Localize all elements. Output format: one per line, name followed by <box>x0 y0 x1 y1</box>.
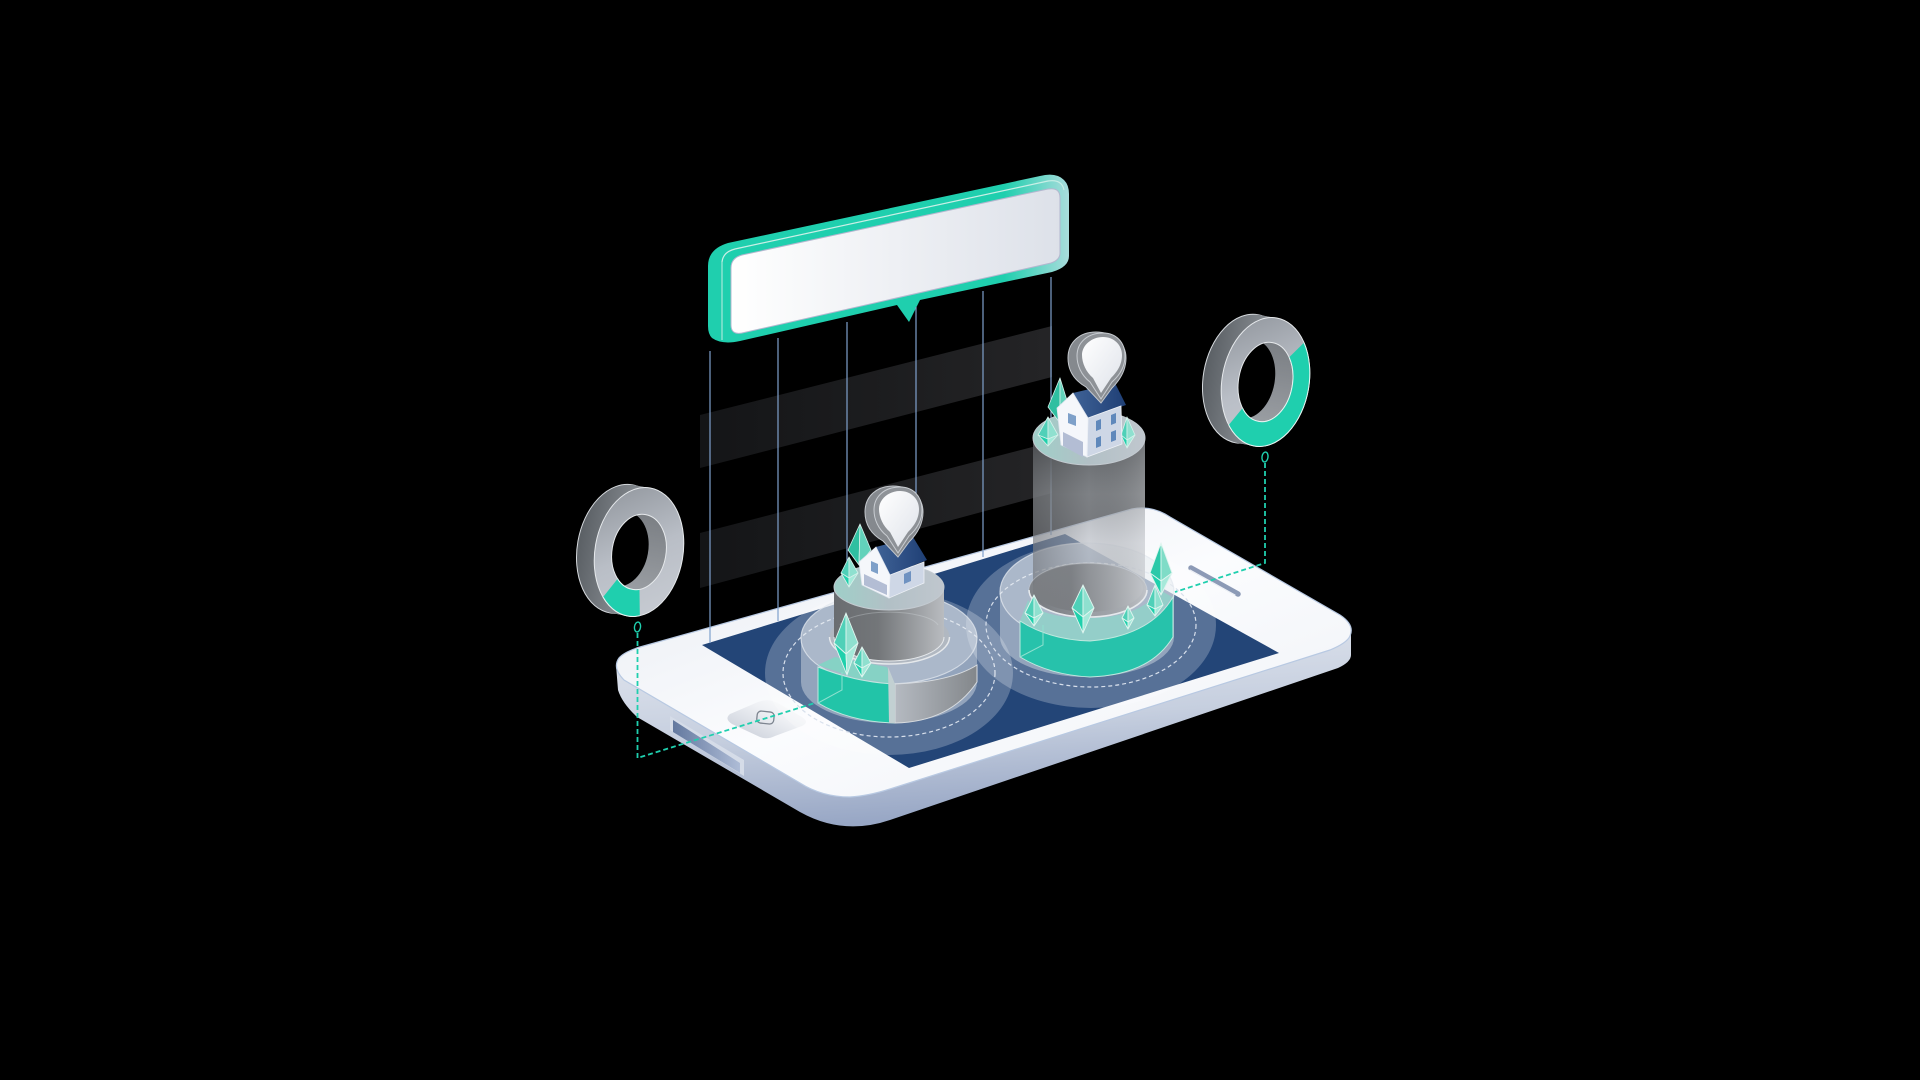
home button <box>727 700 806 738</box>
donut ring left <box>576 484 684 617</box>
inner well of the right base <box>1029 563 1147 617</box>
phone side <box>616 633 1351 826</box>
house large with trees <box>1038 378 1135 457</box>
teal dashed connectors <box>638 463 1265 758</box>
illustration: isometric phone with property columns <box>576 174 1352 826</box>
translucent dark bands <box>700 326 1052 588</box>
well rim of the left base <box>830 610 950 664</box>
map pin large <box>1068 332 1126 403</box>
phone screen <box>702 534 1279 768</box>
speaker slot <box>1190 568 1238 595</box>
trees on left base <box>834 613 871 677</box>
teal progress segment <box>602 578 640 617</box>
phone top face <box>616 508 1351 797</box>
donut ring right <box>1202 314 1310 447</box>
tall column <box>1029 411 1147 617</box>
vertical guide lines <box>710 277 1051 643</box>
trees <box>841 524 871 587</box>
ripple disc right <box>966 542 1216 708</box>
house small with trees <box>841 524 927 598</box>
roof <box>876 537 927 575</box>
left base cylinder <box>801 592 977 723</box>
translucent teal rim <box>1020 590 1172 641</box>
connector anchor right <box>1261 452 1269 462</box>
column cap <box>1033 411 1145 465</box>
small column <box>830 564 950 664</box>
map pin small <box>865 486 923 557</box>
roof <box>1073 383 1126 418</box>
connector anchor left <box>634 622 641 632</box>
gable wall <box>859 547 890 598</box>
right base cylinder <box>1000 543 1174 677</box>
side wall <box>1087 406 1122 457</box>
teal top facet <box>818 657 893 684</box>
phone body <box>616 508 1351 826</box>
small column cap <box>834 564 944 610</box>
speech bubble <box>708 175 1069 342</box>
charging port <box>670 716 744 776</box>
side wall <box>889 562 924 598</box>
teal progress segment <box>1228 342 1310 447</box>
ripple disc left <box>765 591 1013 755</box>
trees <box>1038 378 1135 448</box>
gray segment <box>895 665 977 723</box>
gable wall <box>1057 393 1088 457</box>
trees on right base <box>1025 543 1172 633</box>
teal band <box>1020 597 1173 677</box>
teal segment <box>818 667 895 723</box>
